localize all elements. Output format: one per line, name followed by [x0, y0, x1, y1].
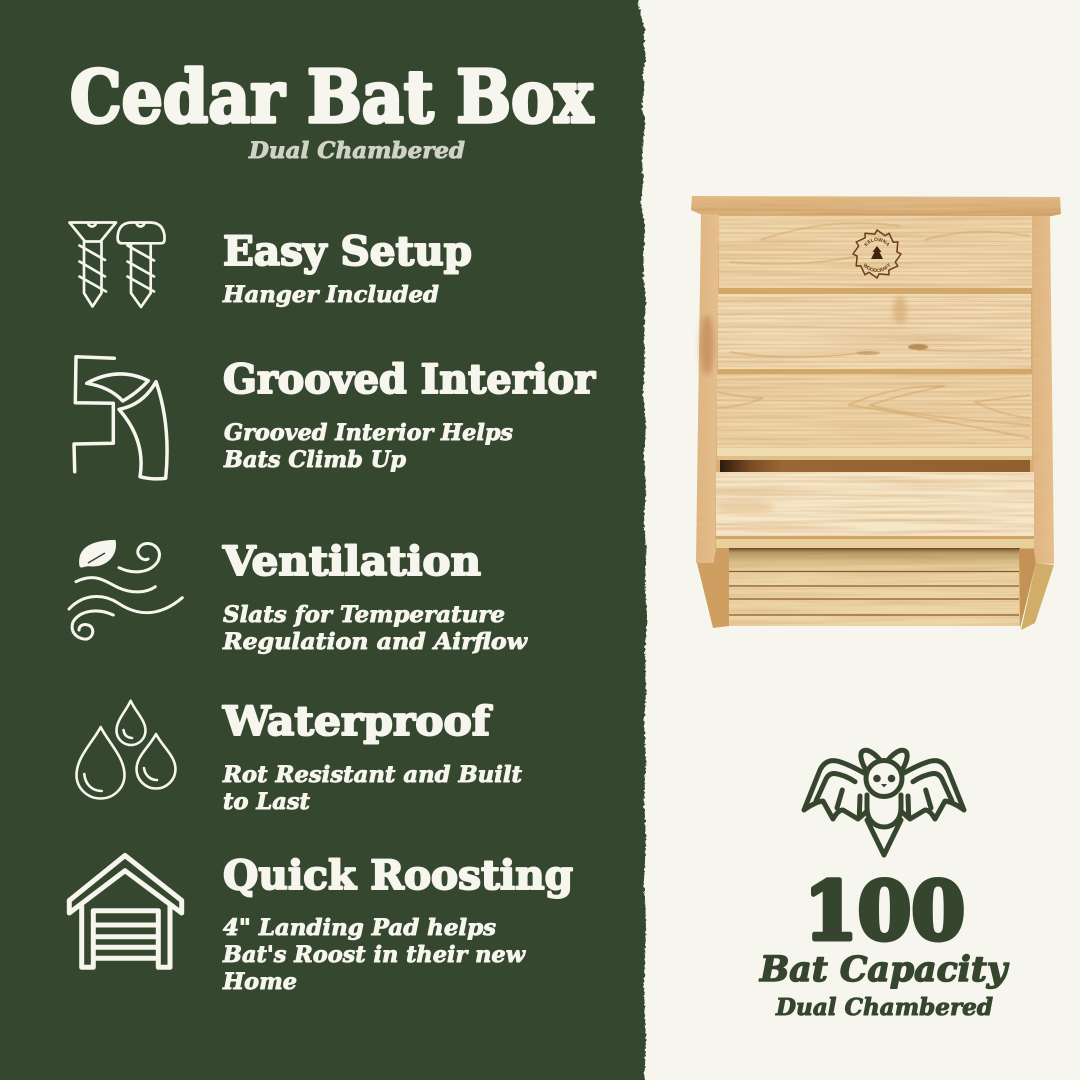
backing: [712, 214, 1038, 550]
feature: waterproof: [76, 698, 522, 815]
text: quick roosting description: Home: [222, 969, 297, 995]
feature: quick roosting: [69, 852, 573, 995]
feature: grooved interior: [74, 356, 596, 479]
right post: [1032, 214, 1054, 564]
text: grooved interior description: Bats Climb Up: [223, 447, 407, 473]
panel gaps: [717, 288, 1032, 472]
icon: bat: [804, 750, 964, 855]
text: quick roosting description: [222, 915, 526, 995]
text: grooved interior description: [223, 420, 513, 473]
text: quick roosting description: Bat's Roost in their new: [222, 942, 526, 968]
text: ventilation description: [222, 602, 528, 655]
knots: [856, 296, 928, 355]
logo: saw blade: KELOWNA: [864, 238, 890, 246]
text: waterproof description: [222, 762, 522, 815]
text: ventilation description: Regulation and Airflow: [222, 629, 528, 655]
heading: grooved interior: Grooved Interior: [223, 356, 596, 403]
logo: saw blade: [852, 229, 902, 279]
icon: leaf and wind: [69, 540, 182, 639]
right foot: [1021, 563, 1054, 630]
text: quick roosting description: 4" Landing Pad helps: [223, 915, 496, 941]
subtitle: Dual Chambered: [248, 138, 465, 164]
feature: easy setup: [70, 222, 472, 308]
grain curves: [718, 223, 1030, 438]
board ridges: [717, 216, 1032, 449]
top cap: [691, 196, 1061, 216]
stat note: dual chambered: Dual Chambered: [775, 994, 993, 1021]
landing panel: [715, 472, 1034, 548]
wood panels: [717, 216, 1032, 449]
icon: water drops: [76, 701, 176, 798]
feature: ventilation: [69, 538, 528, 655]
logo: saw blade: WOODCRAFT: [864, 263, 890, 272]
heading: quick roosting: Quick Roosting: [223, 852, 573, 899]
icon: grooved profile: [74, 357, 167, 479]
post discoloration: [700, 315, 714, 375]
left foot: [697, 548, 729, 628]
text: waterproof description: Rot Resistant and Built: [222, 762, 522, 788]
left post: [696, 214, 719, 563]
icon: garage: [69, 856, 182, 967]
heading: easy setup: Easy Setup: [223, 228, 472, 275]
product photo: cedar bat box: [691, 196, 1061, 630]
stat: 100: 100: [804, 864, 965, 958]
text: ventilation description: Slats for Temperature: [223, 602, 505, 628]
text: waterproof description: to Last: [223, 789, 310, 815]
text: hanger included: Hanger Included: [222, 282, 439, 308]
heading: ventilation: Ventilation: [222, 538, 481, 585]
text: grooved interior description: Grooved Interior Helps: [224, 420, 513, 446]
lower chamber: [728, 548, 1036, 628]
heading: waterproof: Waterproof: [222, 698, 493, 745]
icon: screws: [70, 222, 164, 307]
panel: green torn-edge left column: [0, 0, 647, 1080]
stat label: bat capacity: Bat Capacity: [759, 949, 1010, 990]
title: Cedar Bat Box: [70, 54, 594, 139]
